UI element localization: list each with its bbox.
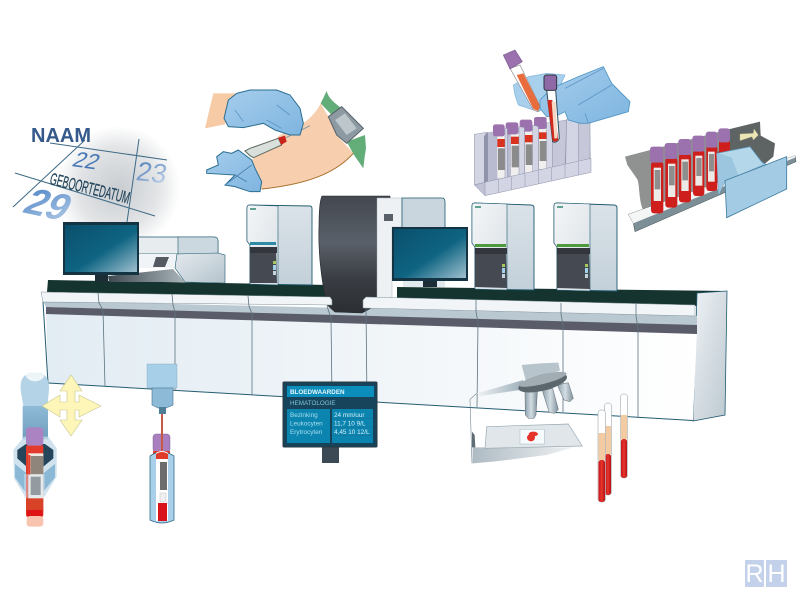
number 29: 29 bbox=[16, 182, 80, 229]
table: 24 mm/uur bbox=[334, 412, 365, 419]
label: naam: NAAM bbox=[31, 125, 91, 147]
microscope and slide bbox=[470, 363, 582, 463]
rail bbox=[628, 156, 796, 232]
tilted tube bbox=[503, 50, 540, 112]
holder opening bbox=[17, 444, 53, 467]
table: 4,45 10 12/L bbox=[334, 429, 370, 436]
green cuff bbox=[321, 91, 366, 168]
tubes bbox=[650, 128, 730, 213]
lower glove bbox=[207, 150, 262, 192]
arm bbox=[23, 406, 48, 439]
sampling needle and tube bbox=[147, 364, 177, 523]
dark bench top bbox=[47, 280, 330, 298]
analyser right bbox=[554, 203, 617, 291]
bench front bbox=[46, 310, 697, 420]
results display: BLOEDWAARDEN bbox=[290, 389, 345, 396]
number 22: 22 bbox=[69, 148, 104, 174]
tube rack with gloved hand bbox=[474, 50, 630, 196]
results display bbox=[283, 382, 377, 463]
subheader: HEMATOLOGIE bbox=[290, 400, 336, 407]
strap bbox=[328, 107, 363, 143]
arm bbox=[250, 103, 353, 189]
dark band bbox=[46, 307, 697, 334]
reader plate bbox=[725, 157, 787, 218]
glass slide bbox=[485, 424, 582, 448]
syringe bbox=[245, 138, 282, 158]
label: geboortedatum: GEBOORTEDATUM bbox=[48, 169, 132, 207]
RH logo: H bbox=[767, 560, 786, 588]
table: Bezinking bbox=[290, 412, 318, 419]
sedimentation tubes bbox=[598, 394, 628, 502]
tubes in rack bbox=[493, 117, 547, 178]
conveyor with tubes and barcode reader bbox=[625, 122, 796, 232]
translucent sleeve bbox=[24, 474, 45, 498]
table: Leukocyten bbox=[290, 420, 323, 428]
gripper top bbox=[21, 375, 49, 409]
central dark analyser bbox=[319, 196, 390, 313]
tube bbox=[26, 427, 43, 527]
reader housing bbox=[717, 147, 767, 195]
section joints bbox=[98, 293, 638, 417]
central white module bbox=[377, 198, 402, 298]
upper glove bbox=[224, 90, 303, 135]
back hand and tilted tube bbox=[513, 73, 565, 112]
slide printer bbox=[108, 237, 225, 283]
forearm left bbox=[205, 93, 237, 128]
microscope head bbox=[522, 363, 560, 384]
table bbox=[287, 409, 373, 443]
bench side face bbox=[693, 291, 727, 421]
white band right bbox=[363, 297, 695, 316]
right monitor bbox=[392, 227, 468, 287]
RH logo: R bbox=[745, 560, 764, 588]
objectives bbox=[525, 383, 573, 418]
table: 11,7 10 9/L bbox=[334, 420, 366, 428]
back wall bbox=[625, 129, 730, 210]
header bar bbox=[287, 386, 374, 397]
white band left bbox=[41, 292, 332, 305]
grey band bbox=[43, 301, 697, 326]
holder outer bbox=[13, 437, 57, 497]
analyser left bbox=[247, 205, 312, 285]
analyser line bbox=[41, 196, 727, 421]
rack back bbox=[474, 120, 591, 196]
four-way arrow bbox=[42, 375, 101, 436]
sampled tube bbox=[153, 434, 170, 452]
calendar: name and date of birth bbox=[13, 125, 185, 250]
held tube bbox=[544, 75, 559, 142]
blood draw: gloved hands and syringe bbox=[205, 90, 366, 192]
hand glove bbox=[540, 67, 630, 123]
RH logo bbox=[745, 560, 787, 588]
table: Erytrocyten bbox=[290, 429, 323, 436]
number 23: 23 bbox=[134, 155, 170, 189]
gripper arm holding tube bbox=[13, 373, 57, 527]
left monitor bbox=[63, 222, 139, 282]
rack fins bbox=[474, 119, 591, 196]
direction arrow bbox=[740, 129, 758, 141]
analyser middle bbox=[472, 203, 534, 290]
